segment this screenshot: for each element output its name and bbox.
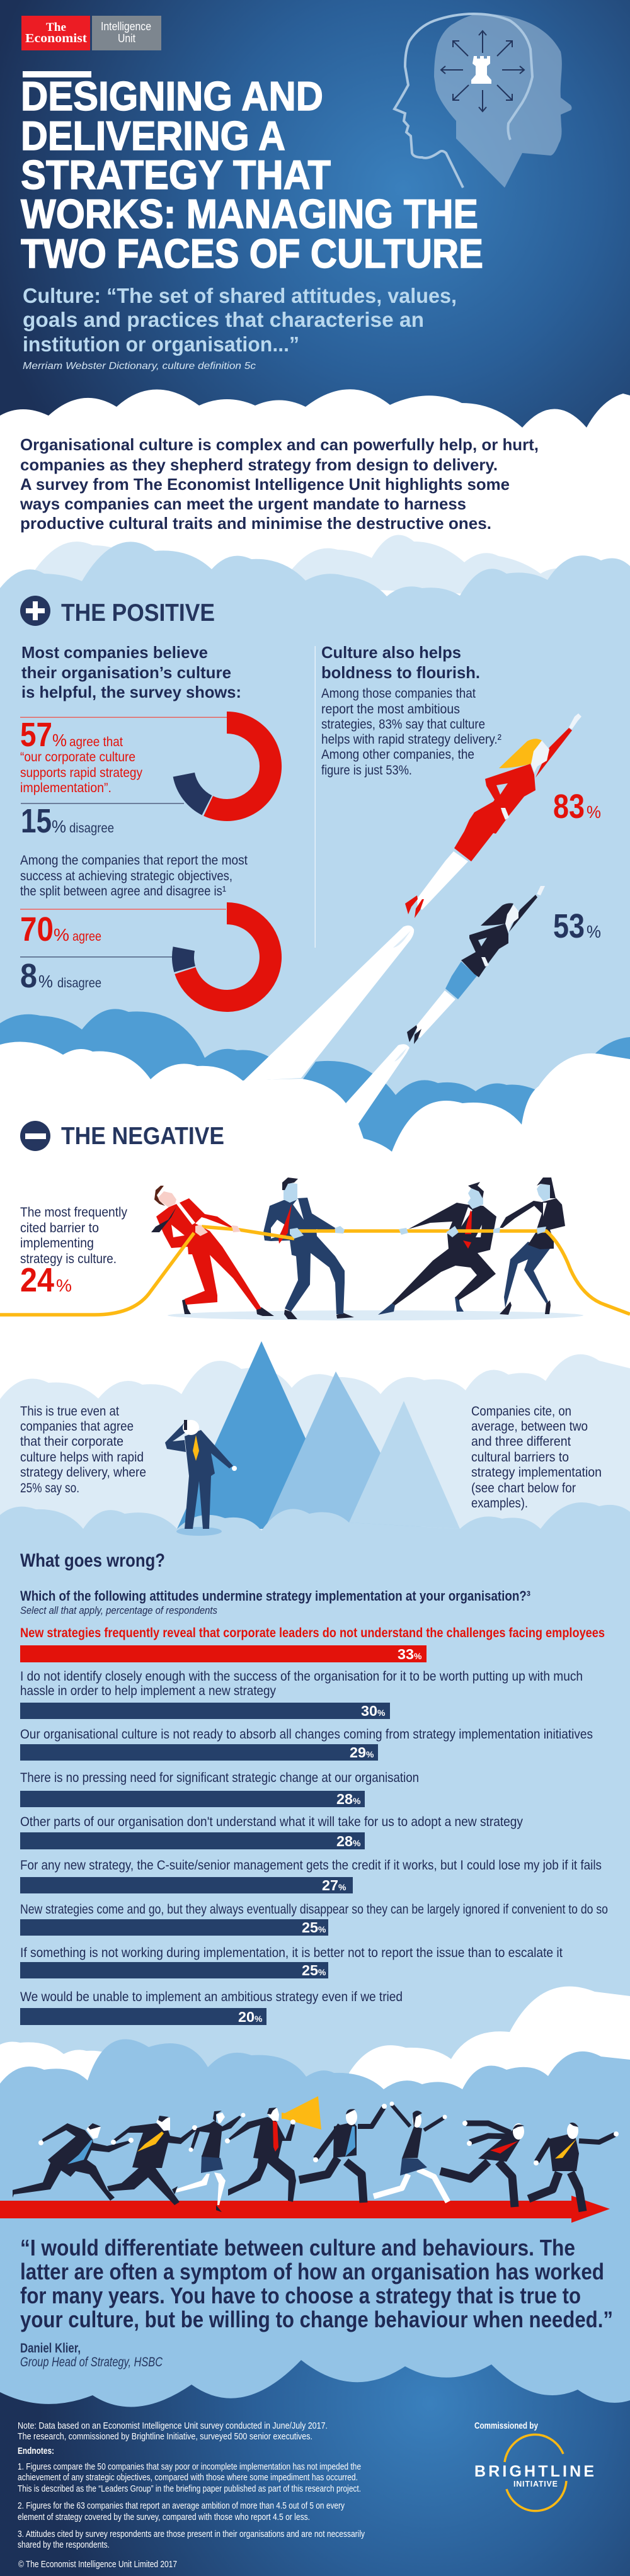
donut chart: 70 agree 8 disagree — [20, 902, 282, 1012]
citation: Merriam Webster Dictionary, culture definition 5c — [23, 361, 256, 372]
bar: 25 percent: 25 — [302, 1919, 318, 1936]
runners illustration — [13, 2096, 619, 2212]
mid blue clouds — [0, 1009, 630, 1165]
bar: 28 percent: There is no pressing need for significant strategic change at our organisation — [20, 1771, 419, 1785]
figure: man on phone — [165, 1420, 237, 1536]
bar: 28 percent second: 28 — [336, 1833, 353, 1849]
bar: 25 percent second: If something is not working during implementation, it is better not to report the issue than to escalate it — [20, 1946, 563, 1960]
quote — [20, 2235, 613, 2332]
stat: 57 percent — [20, 716, 142, 795]
text: ambitious strategies: report the most ambitious — [321, 702, 460, 717]
title: TWO FACES OF CULTURE — [21, 230, 483, 276]
icon: two faces with chess rook — [394, 14, 572, 188]
bar: 25 percent second — [20, 1946, 563, 1978]
stat: 8 percent — [20, 957, 101, 995]
pale clouds — [25, 535, 567, 598]
runner 5 — [299, 2104, 387, 2203]
intro text: productive cultural traits and minimise the destructive ones. — [20, 514, 491, 533]
bar: 33 percent: % — [414, 1651, 422, 1661]
bar: 27 percent — [20, 1858, 602, 1893]
chart subtitle: Select all that apply, percentage of respondents — [20, 1604, 217, 1616]
note and endnotes: Note: Data based on an Economist Intelligence Unit survey conducted in June/July 2017. — [18, 2421, 328, 2431]
bar chart: attitudes — [20, 1626, 608, 2025]
stat: 53 percent: % — [587, 922, 601, 941]
logo: The Economist Intelligence Unit: The — [46, 21, 66, 34]
logo: Brightline Initiative: INITIATIVE — [513, 2480, 558, 2488]
bar: 20 percent: % — [255, 2014, 263, 2024]
text: companies cite barriers: average, between two — [471, 1419, 588, 1434]
quote attribution: Daniel Klier, — [20, 2341, 81, 2356]
white clouds above runners — [0, 1987, 630, 2141]
stat: 57 percent: 57 — [20, 716, 52, 754]
stat: 70 percent — [20, 911, 101, 948]
text: leaders split — [20, 853, 248, 899]
bar: 25 percent — [20, 1902, 608, 1936]
text: ambitious strategies — [321, 686, 501, 778]
bar: 29 percent: 29 — [350, 1744, 366, 1761]
text: true even at companies: strategy delivery, where — [20, 1465, 146, 1480]
white cloud: negative section — [0, 1042, 630, 1385]
stat: 83 percent: % — [587, 802, 601, 822]
logo: Brightline Initiative — [474, 2434, 594, 2511]
text: true even at companies: culture helps with rapid — [20, 1450, 144, 1465]
chart question: Which of the following attitudes undermine strategy implementation at your organisation?³ — [20, 1588, 530, 1604]
heading: the positive: THE POSITIVE — [61, 599, 215, 627]
stat: 83 percent: 83 — [553, 788, 585, 826]
mountains — [177, 1341, 460, 1529]
bar: 28 percent second — [20, 1815, 523, 1849]
note and endnotes: The research, commissioned by Brightline Initiative, surveyed 500 senior executives. — [18, 2432, 312, 2442]
stat: 53 percent: 53 — [553, 907, 585, 945]
pale cloud: mountain section — [0, 1354, 630, 1543]
note and endnotes: element of strategy covered by the survey, compared with those who report 4.5 or less. — [18, 2512, 310, 2522]
text: companies cite barriers — [471, 1404, 602, 1511]
bar: 25 percent second: % — [318, 1967, 326, 1977]
intro text: ways companies can meet the urgent mandate to harness — [20, 494, 466, 513]
culture definition — [23, 284, 457, 356]
runner 4 with megaphone — [225, 2096, 321, 2202]
heading: most companies: is helpful, the survey shows: — [21, 683, 241, 701]
stat: 24 percent: 24 — [20, 1261, 54, 1299]
stat: 15 percent: % — [52, 817, 66, 836]
text: ambitious strategies: Among those companies that — [321, 686, 476, 701]
ground shadow — [168, 1310, 583, 1320]
note and endnotes: Endnotes: — [18, 2446, 54, 2456]
text: true even at companies — [20, 1404, 146, 1495]
text: ambitious strategies: helps with rapid strategy delivery.² — [321, 732, 501, 747]
text: most frequently cited barrier — [20, 1205, 127, 1266]
bar: 20 percent — [20, 1990, 403, 2025]
stat: 70 percent: % — [54, 925, 69, 945]
stat: 8 percent: 8 — [20, 957, 37, 995]
logo: The Economist Intelligence Unit: Unit — [118, 32, 135, 45]
figure: man in dark suit — [378, 1182, 496, 1315]
intro text: Organisational culture is complex and can powerfully help, or hurt, — [20, 435, 539, 454]
figure: man in red — [151, 1186, 274, 1316]
text: ambitious strategies: Among other companies, the — [321, 747, 474, 762]
text: companies cite barriers: Companies cite, on — [471, 1404, 571, 1419]
stat: 57 percent: % — [52, 730, 67, 750]
stat: 8 percent: disagree — [57, 976, 101, 990]
figure: flying woman in red — [405, 713, 581, 918]
stat: 8 percent: % — [38, 972, 53, 991]
culture definition: goals and practices that characterise an — [23, 308, 424, 331]
bar: 27 percent: % — [338, 1882, 346, 1892]
quote attribution: Group Head of Strategy, HSBC — [20, 2355, 163, 2369]
heading: most companies: their organisation’s culture — [21, 663, 231, 682]
red arrow — [0, 2196, 610, 2223]
heading: culture also helps: boldness to flourish. — [321, 663, 480, 682]
stat: 57 percent: implementation”. — [20, 781, 112, 795]
heading: what goes wrong: What goes wrong? — [20, 1550, 165, 1571]
bar: 28 percent — [20, 1771, 419, 1807]
title: STRATEGY THAT — [21, 152, 331, 198]
panel: runners and quote background cloud — [0, 2040, 630, 2456]
rocket trail: red woman — [243, 926, 414, 1081]
culture definition: institution or organisation...” — [23, 332, 299, 356]
panel: footer background — [0, 2360, 630, 2576]
header background — [0, 0, 630, 441]
bar: 28 percent: 28 — [336, 1791, 353, 1807]
bar: 30 percent: I do not identify closely enough with the success of the organisation for it to be worth putting up with much — [20, 1669, 583, 1684]
heading: the negative: THE NEGATIVE — [61, 1123, 224, 1150]
heading: most companies — [21, 643, 241, 701]
donut chart: 57 agree 15 disagree — [20, 712, 282, 821]
text: true even at companies: companies that agree — [20, 1419, 134, 1434]
text: leaders split: Among the companies that report the most — [20, 853, 248, 868]
bar: 30 percent: hassle in order to help implement a new strategy — [20, 1684, 276, 1698]
stat: 57 percent: supports rapid strategy — [20, 766, 142, 780]
rocket trail: dark woman — [346, 1044, 410, 1125]
text: most frequently cited barrier: The most frequently — [20, 1205, 127, 1220]
bar: 29 percent: % — [366, 1749, 374, 1759]
text: ambitious strategies: figure is just 53%. — [321, 763, 412, 778]
bar: 30 percent: % — [377, 1708, 386, 1718]
text: ambitious strategies: strategies, 83% say that culture — [321, 717, 485, 732]
stat: 70 percent: agree — [72, 929, 101, 944]
note and endnotes: achievement of any strategic objectives, compared with those where some impediment has occurred. — [18, 2473, 358, 2483]
stat: 15 percent — [21, 802, 114, 840]
text: companies cite barriers: and three different — [471, 1434, 571, 1449]
intro text: companies as they shepherd strategy from design to delivery. — [20, 455, 498, 474]
figure: woman — [500, 1177, 565, 1315]
title: DESIGNING AND — [21, 73, 323, 119]
logo: Brightline Initiative: BRIGHTLINE — [474, 2463, 594, 2480]
stat: 15 percent: disagree — [69, 821, 114, 836]
panel: what goes wrong background cloud — [0, 1502, 630, 2141]
note and endnotes: 2. Figures for the 63 companies that report an average ambition of more than 4.5 out of 5 on every — [18, 2501, 345, 2511]
hands: blue figures on rope — [290, 1226, 546, 1239]
bar: 33 percent: 33 — [398, 1646, 414, 1662]
icon: rook — [471, 56, 491, 84]
logo: The Economist Intelligence Unit: Intelligence — [101, 20, 151, 33]
white cloud under header — [0, 389, 630, 567]
intro text — [20, 435, 539, 533]
runner 2 — [107, 2116, 197, 2205]
heading: the negative — [20, 1121, 224, 1151]
stat: 24 percent: % — [56, 1276, 72, 1295]
copyright: © The Economist Intelligence Unit Limited 2017 — [18, 2560, 177, 2570]
rope — [0, 1227, 630, 1315]
text: true even at companies: This is true even at — [20, 1404, 119, 1419]
text: companies cite barriers: examples). — [471, 1496, 528, 1511]
title — [21, 73, 483, 276]
commissioned by: Commissioned by — [474, 2420, 539, 2431]
heading: culture also helps: Culture also helps — [321, 643, 461, 662]
icon: arrows radiating — [441, 31, 524, 111]
bar: 30 percent: 30 — [361, 1703, 377, 1719]
runner 1 — [13, 2123, 134, 2201]
stat: 57 percent: agree that — [69, 735, 123, 749]
tug of war illustration — [0, 1177, 630, 1319]
bar: 20 percent: We would be unable to implement an ambitious strategy even if we tried — [20, 1990, 403, 2004]
intro text: A survey from The Economist Intelligence Unit highlights some — [20, 475, 510, 494]
text: most frequently cited barrier: implementing — [20, 1236, 94, 1251]
note and endnotes: 1. Figures compare the 50 companies that say poor or incomplete implementation has not impeded the — [18, 2462, 361, 2472]
figure: flying woman in dark suit — [407, 886, 545, 1044]
text: true even at companies: 25% say so. — [20, 1481, 79, 1495]
bar: 27 percent: 27 — [322, 1877, 338, 1893]
title bar accent — [23, 71, 91, 77]
runner 8 — [529, 2123, 619, 2211]
heading: the positive — [20, 596, 215, 627]
bar: 28 percent second: Other parts of our organisation don't understand what it will take for us to adopt a new strategy — [20, 1815, 523, 1829]
hands — [195, 1225, 241, 1236]
bar: 33 percent — [20, 1626, 605, 1662]
runner 7 — [440, 2121, 524, 2207]
bar: 20 percent: 20 — [238, 2009, 255, 2025]
note and endnotes: shared by the respondents. — [18, 2540, 110, 2550]
title: DELIVERING A — [21, 113, 285, 159]
title: WORKS: MANAGING THE — [21, 191, 478, 237]
text: true even at companies: that their corporate — [20, 1434, 123, 1449]
stat: 70 percent: 70 — [20, 911, 54, 948]
panel: positive background cloud — [0, 542, 630, 1108]
text: companies cite barriers: cultural barriers to — [471, 1450, 569, 1465]
stat: 15 percent: 15 — [21, 802, 52, 840]
quote attribution — [20, 2341, 163, 2369]
text: most frequently cited barrier: strategy is culture. — [20, 1252, 117, 1266]
text: most frequently cited barrier: cited barrier to — [20, 1221, 99, 1235]
heading: culture also helps — [321, 643, 480, 682]
runner 6 — [374, 2102, 448, 2202]
text: companies cite barriers: (see chart below for — [471, 1481, 576, 1495]
note and endnotes: 3. Attitudes cited by survey respondents are those present in their organisations and are not necessarily — [18, 2529, 365, 2539]
note and endnotes — [18, 2421, 365, 2550]
note and endnotes: This is described as the “Leaders Group” in the briefing paper published as part of this research project. — [18, 2484, 361, 2494]
text: leaders split: success at achieving strategic objectives, — [20, 869, 232, 883]
text: companies cite barriers: strategy implementation — [471, 1465, 602, 1480]
bar: 25 percent: % — [318, 1924, 326, 1934]
figure: man in blue — [263, 1177, 354, 1319]
bar: 29 percent — [20, 1727, 593, 1761]
bar: 25 percent second: 25 — [302, 1962, 318, 1978]
bar: 28 percent second: % — [353, 1838, 361, 1848]
heading: most companies: Most companies believe — [21, 643, 208, 662]
culture definition: Culture: “The set of shared attitudes, values, — [23, 284, 457, 307]
logo: The Economist Intelligence Unit — [21, 16, 161, 50]
bar: 30 percent — [20, 1669, 583, 1719]
bar: 28 percent: % — [353, 1796, 361, 1806]
logo: The Economist Intelligence Unit: Economist — [25, 31, 87, 45]
runner 3 — [172, 2111, 246, 2212]
stat: 57 percent: “our corporate culture — [20, 750, 135, 764]
text: leaders split: the split between agree and disagree is¹ — [20, 884, 226, 899]
